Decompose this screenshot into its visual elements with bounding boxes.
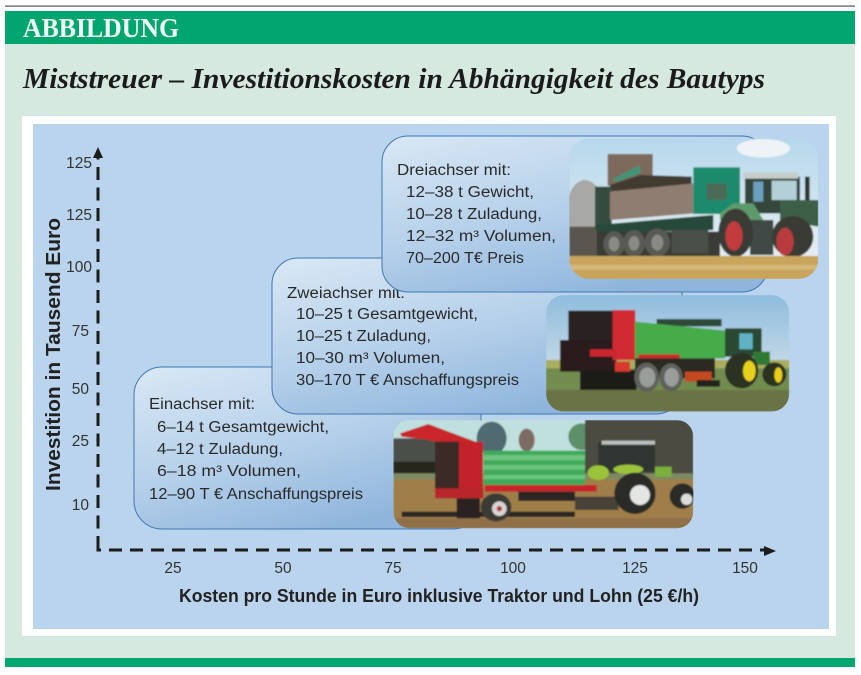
card: Dreiachser (382, 136, 768, 292)
card: Zweiachser: Zweiachser mit: (287, 285, 405, 302)
card: Zweiachser: 10–30 m³ Volumen, (296, 350, 445, 367)
title: Miststreuer – Investitionskosten in Abhängigkeit des Bautyps (22, 64, 765, 95)
chart frame (22, 116, 836, 636)
card: Einachser: 4–12 t Zuladung, (157, 441, 283, 458)
card: Zweiachser: 10–25 t Zuladung, (296, 328, 431, 345)
y axis tick labels: 125 (66, 155, 92, 172)
y axis tick labels: 10 (72, 497, 89, 514)
card: Dreiachser: Dreiachser mit: (397, 162, 511, 179)
card: Einachser (134, 367, 481, 529)
y axis tick labels: 50 (72, 381, 89, 398)
x axis tick labels: 150 (732, 560, 758, 577)
x axis tick labels: 75 (384, 560, 402, 577)
card: Einachser: Einachser mit: (149, 396, 255, 413)
photo: Zweiachser spreader with tractor (546, 295, 789, 412)
card: Einachser: 6–18 m³ Volumen, (157, 463, 301, 480)
card: Einachser: 12–90 T € Anschaffungspreis (149, 486, 363, 503)
y axis (93, 147, 103, 549)
card: Dreiachser: 10–28 t Zuladung, (406, 206, 542, 223)
card: Einachser: 6–14 t Gesamtgewicht, (157, 419, 329, 436)
card: Zweiachser (272, 258, 682, 414)
y axis tick labels (66, 155, 92, 514)
card: Dreiachser: 12–32 m³ Volumen, (406, 228, 556, 245)
photo: Dreiachser spreader with tractor (565, 138, 818, 279)
card: Zweiachser: 10–25 t Gesamtgewicht, (296, 306, 478, 323)
y axis tick labels: 75 (72, 323, 89, 340)
x axis tick labels (164, 560, 758, 577)
y axis tick labels: 25 (72, 433, 89, 450)
card: Dreiachser: 12–38 t Gewicht, (406, 184, 534, 201)
x axis tick labels: 50 (274, 560, 292, 577)
x axis (98, 540, 776, 556)
card: Dreiachser: 70–200 T€ Preis (406, 250, 524, 267)
bottom bar (5, 658, 855, 667)
x axis tick labels: 125 (622, 560, 648, 577)
card: Zweiachser: 30–170 T € Anschaffungspreis (296, 372, 519, 389)
x axis tick labels: 100 (500, 560, 526, 577)
photo: Einachser spreader with tractor (393, 420, 695, 528)
header bar (5, 11, 855, 44)
y axis tick labels: 125 (66, 207, 92, 224)
x axis tick labels: 25 (164, 560, 182, 577)
header bar: ABBILDUNG (23, 13, 179, 43)
x axis title: Kosten pro Stunde in Euro inklusive Traktor und Lohn (25 €/h) (179, 586, 699, 606)
y axis tick labels: 100 (66, 259, 92, 276)
y axis title: Investition in Tausend Euro (43, 218, 65, 491)
